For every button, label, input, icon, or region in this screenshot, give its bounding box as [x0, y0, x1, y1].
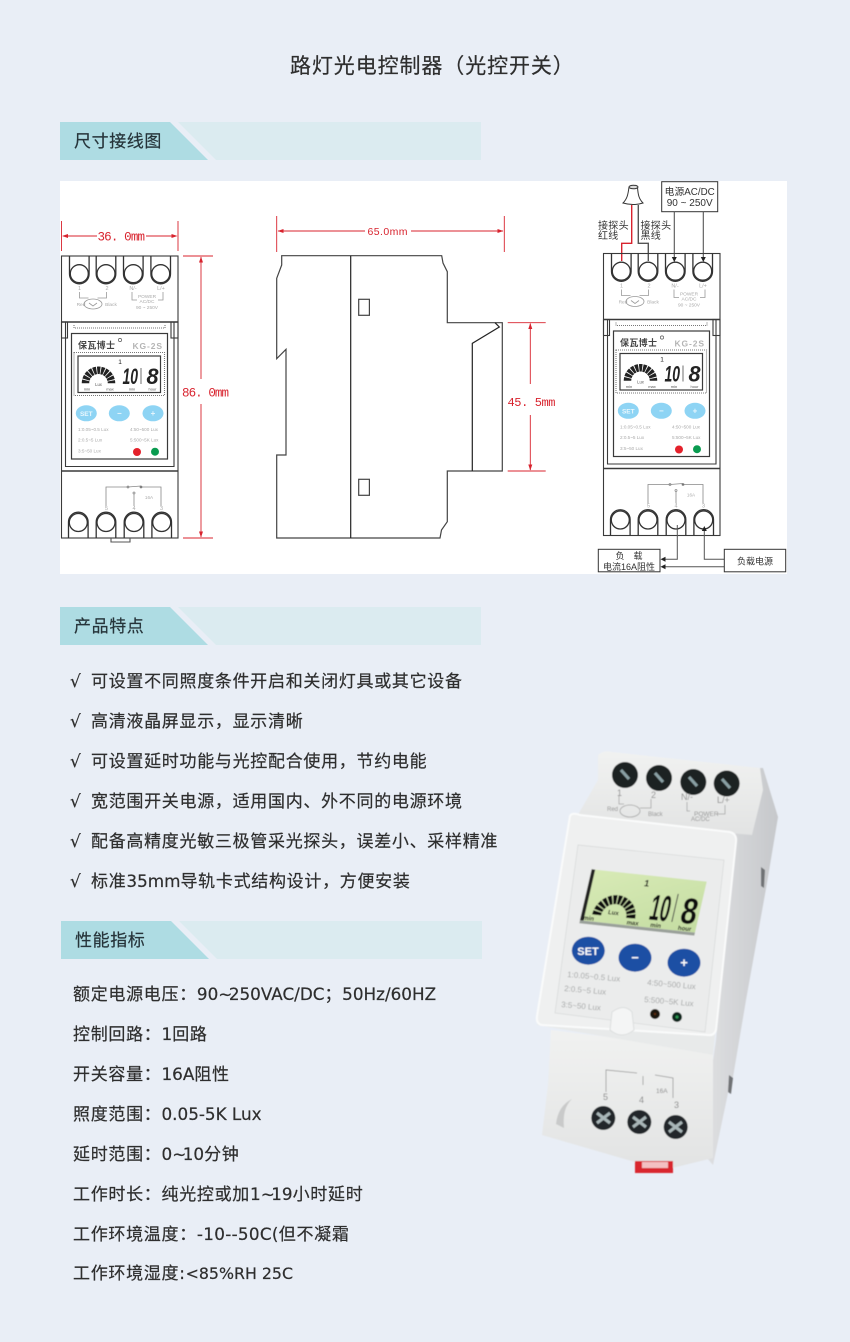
top labels: 1 [617, 788, 622, 798]
device outline [604, 254, 720, 536]
LCD screen: Lux [607, 909, 620, 917]
lux ranges and indicator lamps [78, 427, 159, 456]
load power box [724, 549, 786, 572]
power supply box: 90 ~ 250V [667, 198, 713, 209]
specification list [73, 984, 436, 1284]
brand and model [78, 338, 162, 351]
top screws [612, 762, 740, 796]
specification list: 工作环境温度：-10--50C(但不凝霜 [73, 1224, 350, 1245]
blue buttons [572, 937, 700, 977]
housing bottom block [542, 1030, 713, 1168]
lux ranges and indicator lamps: 3:5~50 Lux [620, 446, 644, 451]
LCD screen: hour [677, 925, 693, 933]
device outline [62, 256, 178, 542]
load power box: 负载电源 [737, 556, 773, 566]
top labels: N/- [681, 792, 693, 802]
section header: product features [60, 607, 481, 645]
LCD screen: 10 [646, 887, 675, 929]
LCD screen [579, 869, 707, 936]
blue buttons: + [680, 955, 688, 970]
load contact schematic: 16A [145, 495, 154, 500]
lux ranges and indicator lamps: 1:0.05~0.5 Lux [620, 424, 651, 430]
wiring view device [598, 182, 786, 572]
load contact schematic: 5 [105, 506, 108, 512]
probe wires [622, 205, 648, 261]
bottom block shadow [556, 1099, 572, 1128]
indicator lamps [650, 1009, 682, 1022]
specification list: 开关容量：16A阻性 [73, 1064, 230, 1085]
height dimension 86.0mm: 86. 0mm [182, 386, 229, 400]
brand and model [620, 336, 704, 348]
lux ranges and indicator lamps: 5:500~5K Lux [130, 438, 159, 442]
lux range labels: 5:500~5K Lux [644, 995, 694, 1008]
section header: dimensions and wiring: 尺寸接线图 [74, 132, 162, 152]
lux ranges and indicator lamps [620, 424, 701, 454]
load box [598, 549, 660, 572]
lux ranges and indicator lamps: 4:50~500 Lux [672, 424, 701, 430]
buttons: − [117, 409, 122, 418]
LCD readout: max [106, 386, 114, 392]
top terminals [70, 256, 170, 284]
top labels: AC/DC [691, 817, 710, 823]
power supply box [662, 182, 718, 212]
probe wire labels: 红线 [598, 229, 619, 242]
top terminal labels: N/- [129, 286, 137, 292]
load schematic: 16A [656, 1088, 668, 1095]
LCD readout: 1 [660, 356, 664, 364]
load box: 负 载 [615, 550, 643, 561]
side view device with dimensions [277, 216, 556, 538]
lux range labels: 2:0.5~5 Lux [564, 984, 606, 997]
top terminal labels: 90 ~ 250V [678, 302, 701, 308]
product photo [536, 761, 778, 1174]
rail height dimension 45.5mm [508, 323, 556, 471]
top labels: Black [648, 812, 664, 818]
load contact schematic [647, 484, 705, 510]
sensor symbol on top block [619, 795, 725, 817]
LCD readout: hour [690, 384, 699, 389]
depth dimension 65.0mm: 65.0mm [368, 226, 408, 238]
panel: dimension and wiring diagram [60, 181, 787, 574]
lux ranges and indicator lamps: 3:5~50 Lux [78, 448, 102, 454]
load contact schematic: 16A [687, 492, 696, 498]
load box: 电流16A阻性 [603, 561, 655, 572]
blue buttons: SET [577, 946, 599, 958]
LCD screen: max [626, 919, 640, 928]
lux ranges and indicator lamps: 5:500~5K Lux [672, 435, 701, 440]
feature list: 标准35mm导轨卡式结构设计，方便安装 [91, 871, 411, 892]
LCD readout: min [84, 386, 90, 392]
top terminal labels: 90 ~ 250V [136, 305, 159, 311]
brand and model: 保瓦博士 [78, 340, 115, 350]
LCD readout: min [129, 386, 135, 392]
width dimension 36.0mm: 36. 0mm [98, 230, 145, 244]
top terminal labels [77, 286, 165, 311]
LCD readout: 8 [146, 364, 159, 389]
top terminal labels: Red [619, 300, 628, 306]
sensor symbol [80, 292, 163, 309]
probe wire labels: 接探头 [598, 219, 629, 232]
width dimension 36.0mm [62, 221, 178, 251]
feature list: 配备高精度光敏三极管采光探头，误差小、采样精准 [91, 832, 498, 852]
top terminal labels: 1 [620, 284, 623, 290]
bottom terminals [68, 512, 172, 538]
load contact schematic: 3 [702, 504, 705, 510]
top labels: 2 [651, 790, 656, 800]
brand and model: KG-2S [674, 338, 704, 348]
LCD screen: 1 [643, 878, 650, 889]
bottom terminals [610, 510, 714, 536]
specification list: 额定电源电压：90~250VAC/DC；50Hz/60HZ [73, 984, 436, 1005]
top terminal labels: AC/DC [682, 296, 697, 302]
top labels: L/+ [717, 795, 730, 805]
top terminal labels: Black [647, 300, 659, 306]
power supply box: 电源AC/DC [665, 185, 715, 198]
LCD readout: Lux [95, 382, 103, 387]
feature list: √ [70, 792, 82, 812]
feature list: √ [70, 872, 82, 892]
feature list: 高清液晶屏显示，显示清晰 [91, 712, 303, 732]
height dimension 86.0mm [182, 256, 229, 538]
section header: performance specifications: 性能指标 [75, 931, 145, 951]
probe wire labels: 接探头 [640, 219, 671, 232]
LCD readout: max [648, 384, 656, 389]
load contact schematic: 4 [132, 506, 136, 512]
feature list: √ [70, 832, 82, 852]
buttons [76, 405, 164, 421]
buttons: SET [80, 411, 93, 418]
top terminal labels [619, 284, 707, 308]
cover latch [610, 1008, 634, 1035]
top terminal labels: L/+ [157, 286, 165, 292]
top terminal labels: N/- [671, 284, 679, 290]
bottom screws [591, 1106, 688, 1139]
side rail notches [728, 867, 765, 1094]
faceplate [555, 845, 724, 1032]
housing middle block [537, 815, 735, 1055]
transparent cover [537, 814, 736, 1035]
load schematic: 3 [674, 1100, 679, 1110]
buttons [618, 403, 706, 419]
top terminal labels: Red [77, 302, 86, 308]
probe wire labels: 黑线 [640, 229, 661, 242]
lux ranges and indicator lamps: 2:0.5~5 Lux [78, 438, 103, 442]
LCD readout: min [626, 384, 632, 389]
LCD readout: 8 [688, 362, 701, 386]
LCD readout: 10 [664, 362, 680, 386]
top terminal labels: L/+ [699, 284, 707, 290]
buttons: SET [622, 408, 635, 416]
top terminal labels: 1 [78, 286, 81, 292]
top labels: POWER [694, 811, 719, 818]
specification list: 工作时长：纯光控或加1~19小时延时 [73, 1184, 363, 1205]
top labels [607, 788, 730, 823]
light probe [623, 185, 643, 204]
buttons: + [693, 406, 698, 416]
specification list: 工作环境湿度:<85%RH 25C [73, 1264, 293, 1284]
load wires [660, 525, 724, 569]
LCD readout: Lux [637, 380, 645, 384]
load schematic: 4 [639, 1095, 644, 1105]
LCD readout: min [671, 384, 677, 389]
depth dimension 65.0mm [277, 216, 504, 252]
top terminal labels: 2 [647, 284, 651, 290]
LCD readout [626, 356, 701, 389]
LCD readout [84, 359, 159, 392]
LCD screen: 8 [677, 890, 702, 932]
lux range labels: 1:0.05~0.5 Lux [567, 970, 621, 984]
top terminal labels: 2 [105, 286, 109, 292]
section header: product features: 产品特点 [74, 617, 144, 637]
buttons: + [151, 409, 156, 418]
top terminal labels: Black [105, 302, 117, 308]
lux ranges and indicator lamps: 4:50~500 Lux [130, 427, 159, 432]
front view device with dimensions [62, 221, 229, 542]
load schematic [603, 1070, 679, 1110]
power wires [672, 212, 706, 262]
blue buttons: − [631, 950, 639, 965]
housing side [700, 768, 778, 1165]
buttons: − [659, 406, 664, 416]
top labels: Red [607, 807, 618, 813]
brand and model: KG-2S [132, 341, 162, 351]
load contact schematic: 4 [674, 504, 678, 510]
section header: performance specifications [61, 921, 482, 959]
lux range labels: 4:50~500 Lux [647, 978, 696, 991]
lux ranges and indicator lamps: 2:0.5~5 Lux [620, 435, 645, 440]
rail height dimension 45.5mm: 45. 5mm [508, 396, 556, 410]
lux range labels: 3:5~50 Lux [561, 1000, 601, 1012]
feature list [70, 672, 498, 892]
housing top block [575, 751, 763, 835]
side profile outline [277, 256, 502, 538]
feature list: 可设置延时功能与光控配合使用，节约电能 [91, 752, 427, 772]
feature list: √ [70, 712, 82, 732]
red DIN clip [635, 1161, 673, 1173]
LCD screen: min [649, 922, 662, 930]
feature list: √ [70, 672, 82, 692]
section header: dimensions and wiring [60, 122, 481, 160]
specification list: 控制回路：1回路 [73, 1024, 208, 1045]
top terminal labels: POWER [138, 294, 157, 300]
load contact schematic: 3 [160, 506, 163, 512]
feature list: 可设置不同照度条件开启和关闭灯具或其它设备 [91, 672, 463, 692]
specification list: 照度范围：0.05-5K Lux [73, 1104, 262, 1125]
load contact schematic: 5 [647, 504, 650, 510]
LCD screen: min [582, 915, 595, 923]
load schematic: 5 [603, 1092, 608, 1102]
title: 路灯光电控制器（光控开关） [290, 54, 575, 78]
lux range labels [561, 970, 696, 1012]
feature list: 宽范围开关电源，适用国内、外不同的电源环境 [91, 792, 463, 812]
feature list: √ [70, 752, 82, 772]
specification list: 延时范围：0~10分钟 [73, 1144, 240, 1165]
load contact schematic [105, 486, 163, 512]
probe wire labels [598, 219, 671, 242]
top terminals [612, 254, 712, 281]
LCD readout: hour [148, 386, 157, 392]
sensor symbol [622, 290, 705, 306]
LCD readout: 1 [118, 359, 122, 366]
top terminal labels: AC/DC [140, 299, 155, 305]
lux ranges and indicator lamps: 1:0.05~0.5 Lux [78, 427, 109, 432]
top terminal labels: POWER [680, 292, 699, 298]
brand and model: 保瓦博士 [620, 337, 657, 348]
LCD readout: 10 [122, 364, 138, 389]
